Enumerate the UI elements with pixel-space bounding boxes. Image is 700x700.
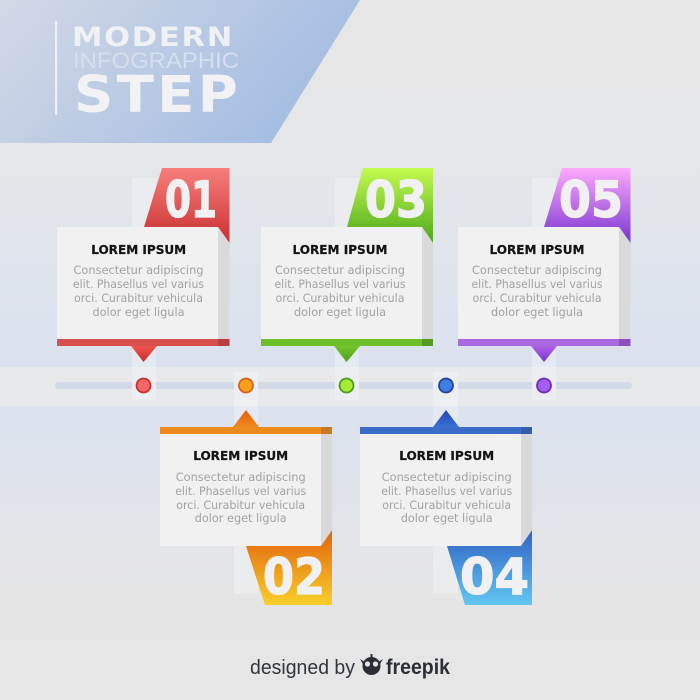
step 05: elit. Phasellus vel varius (472, 277, 602, 291)
step 03: LOREM IPSUM (292, 242, 388, 257)
step 01: Consectetur adipiscing (74, 263, 204, 277)
step 01: dolor eget ligula (92, 305, 184, 319)
step 02 (160, 372, 332, 606)
step 04: dolor eget ligula (401, 511, 493, 525)
step 02: elit. Phasellus vel varius (175, 484, 306, 498)
step 02: dolor eget ligula (195, 511, 287, 525)
step 03: orci. Curabitur vehicula (276, 291, 404, 305)
step 04: elit. Phasellus vel varius (381, 484, 512, 498)
step 04 (360, 372, 532, 606)
step 04: Consectetur adipiscing (382, 470, 512, 484)
timeline (55, 372, 632, 400)
header panel: MODERN (72, 22, 234, 53)
step 05: 05 (559, 171, 623, 229)
freepik credit: designed by (250, 657, 355, 679)
step 01: elit. Phasellus vel varius (73, 277, 204, 291)
step 03: Consectetur adipiscing (275, 263, 405, 277)
timeline band (0, 367, 700, 406)
step 04: LOREM IPSUM (399, 448, 494, 463)
step 05: LOREM IPSUM (490, 242, 584, 257)
step 05 (458, 168, 630, 400)
step 01: LOREM IPSUM (91, 242, 186, 257)
step 03: 03 (365, 171, 427, 229)
step 02: 02 (263, 548, 325, 606)
header panel: INFOGRAPHIC (73, 48, 239, 73)
step 04: orci. Curabitur vehicula (382, 498, 511, 512)
header panel: STEP (74, 66, 241, 125)
step 03: dolor eget ligula (294, 305, 386, 319)
step 02: orci. Curabitur vehicula (176, 498, 305, 512)
step 05: dolor eget ligula (491, 305, 583, 319)
header panel (0, 0, 360, 143)
step 04: 04 (460, 548, 529, 606)
step 01 (57, 168, 230, 400)
step 05: orci. Curabitur vehicula (472, 291, 602, 305)
step 05: Consectetur adipiscing (472, 263, 602, 277)
freepik credit: freepik (386, 656, 450, 679)
step 03 (261, 168, 433, 400)
step 03: elit. Phasellus vel varius (274, 277, 406, 291)
step 01: 01 (165, 171, 217, 229)
step 02: Consectetur adipiscing (176, 470, 306, 484)
step 01: orci. Curabitur vehicula (74, 291, 203, 305)
freepik credit (250, 654, 450, 679)
step 02: LOREM IPSUM (193, 448, 288, 463)
